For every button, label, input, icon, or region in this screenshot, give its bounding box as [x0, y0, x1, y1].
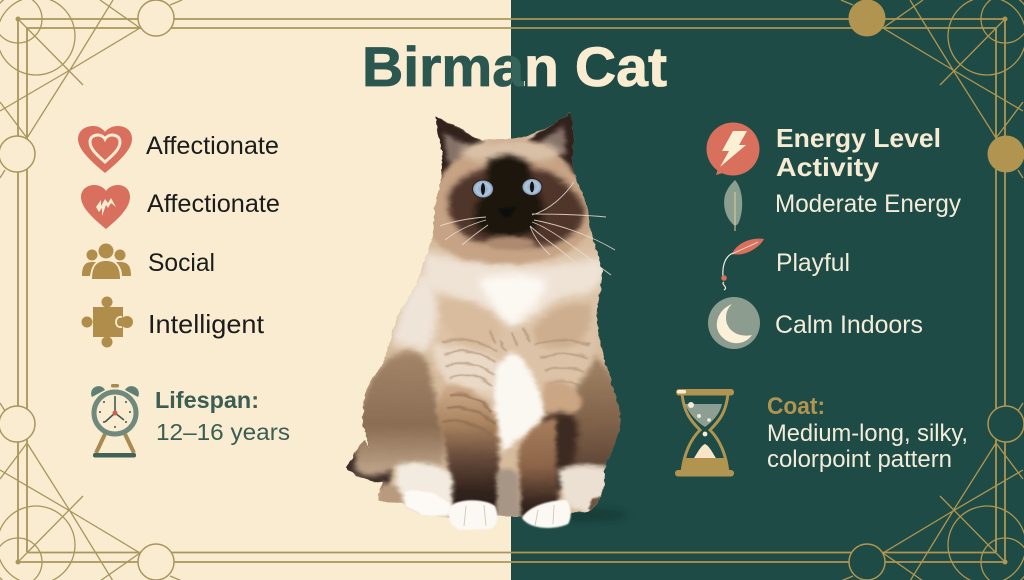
- cat whiskers: [440, 182, 615, 275]
- cat face fur: [428, 138, 593, 264]
- text: affectionate: Affectionate: [146, 132, 279, 160]
- icon: crescent moon: [708, 297, 760, 349]
- cat chest tan left: [440, 300, 498, 344]
- text: energy level activity: Activity: [776, 152, 880, 182]
- icon: group of people: [82, 244, 131, 279]
- icon: lightning bolt badge: [706, 122, 760, 176]
- cat centre chest white: [478, 274, 548, 326]
- cat chest fur strokes: [442, 328, 590, 386]
- icon: heart with outline: [78, 126, 132, 173]
- cat dark mask: [475, 156, 543, 238]
- text: lifespan: Lifespan:: [155, 387, 259, 413]
- cat collar ruff: [424, 248, 605, 325]
- cat left rear tan: [376, 482, 405, 505]
- title: Birman Cat: [362, 35, 667, 98]
- cat paw gap: [497, 469, 519, 518]
- cat left eye: [472, 180, 494, 198]
- panel: cream left background: [0, 0, 511, 580]
- icon: heart with zigzag: [81, 185, 130, 229]
- ornamental frame: left side: [0, 0, 511, 580]
- cat body and fur: [346, 112, 621, 518]
- title: Birman Cat: [362, 35, 667, 98]
- cat shadow: [552, 508, 628, 522]
- title: [365, 45, 667, 87]
- cat left rear foot: [395, 462, 453, 518]
- cat right rear foot: [558, 465, 608, 514]
- cat tail: [340, 436, 392, 492]
- cat nose: [498, 207, 516, 217]
- cat leg stripes: [442, 394, 496, 438]
- ornamental frame: right side: [511, 0, 1024, 580]
- text: calm indoors: Calm Indoors: [775, 311, 923, 339]
- cat right front leg: [518, 418, 560, 516]
- text: playful: Playful: [776, 249, 850, 277]
- panel: green right background: [511, 0, 1024, 580]
- text: coat: Medium-long, silky,: [767, 420, 968, 447]
- cat head: [428, 108, 593, 264]
- cat left haunch: [355, 351, 445, 476]
- cat mid chest pale: [432, 345, 497, 395]
- cat upper body cream: [434, 248, 603, 407]
- text: lifespan: [155, 387, 290, 445]
- text: social: Social: [148, 249, 215, 277]
- cat forehead light: [460, 141, 560, 163]
- text: affectionate second: Affectionate: [147, 190, 280, 218]
- text: coat: colorpoint pattern: [767, 446, 952, 473]
- icon: puzzle piece: [82, 296, 133, 348]
- cat left front leg: [436, 383, 499, 520]
- cat dark inner right: [540, 413, 578, 492]
- cat belly white: [494, 353, 545, 452]
- text: energy level activity: [776, 123, 941, 182]
- cat chest tan right: [532, 304, 592, 348]
- cat front paws: [448, 500, 571, 530]
- icon: feather toy: [721, 239, 764, 290]
- cat ears: [436, 112, 576, 184]
- text: intelligent: Intelligent: [148, 309, 265, 339]
- text: moderate energy: Moderate Energy: [775, 190, 961, 218]
- title: Birman Cat: [362, 35, 667, 98]
- cat inner ears: [444, 126, 566, 166]
- text: coat: Coat:: [767, 393, 825, 420]
- icon: alarm clock: [91, 384, 139, 458]
- cat right shoulder: [543, 381, 582, 417]
- cat illustration: [340, 100, 630, 540]
- text: lifespan: 12–16 years: [156, 419, 290, 445]
- cat left side pale: [392, 272, 437, 352]
- cat right eye: [522, 178, 542, 196]
- text: energy level activity: Energy Level: [776, 123, 941, 153]
- icon: leaf: [724, 180, 742, 231]
- cat dark cheeks: [448, 167, 585, 246]
- cat paw toe lines: [464, 505, 554, 526]
- icon: hourglass: [675, 389, 734, 476]
- cat chin: [486, 236, 534, 250]
- cat right haunch: [568, 354, 621, 470]
- text: coat: [767, 393, 968, 473]
